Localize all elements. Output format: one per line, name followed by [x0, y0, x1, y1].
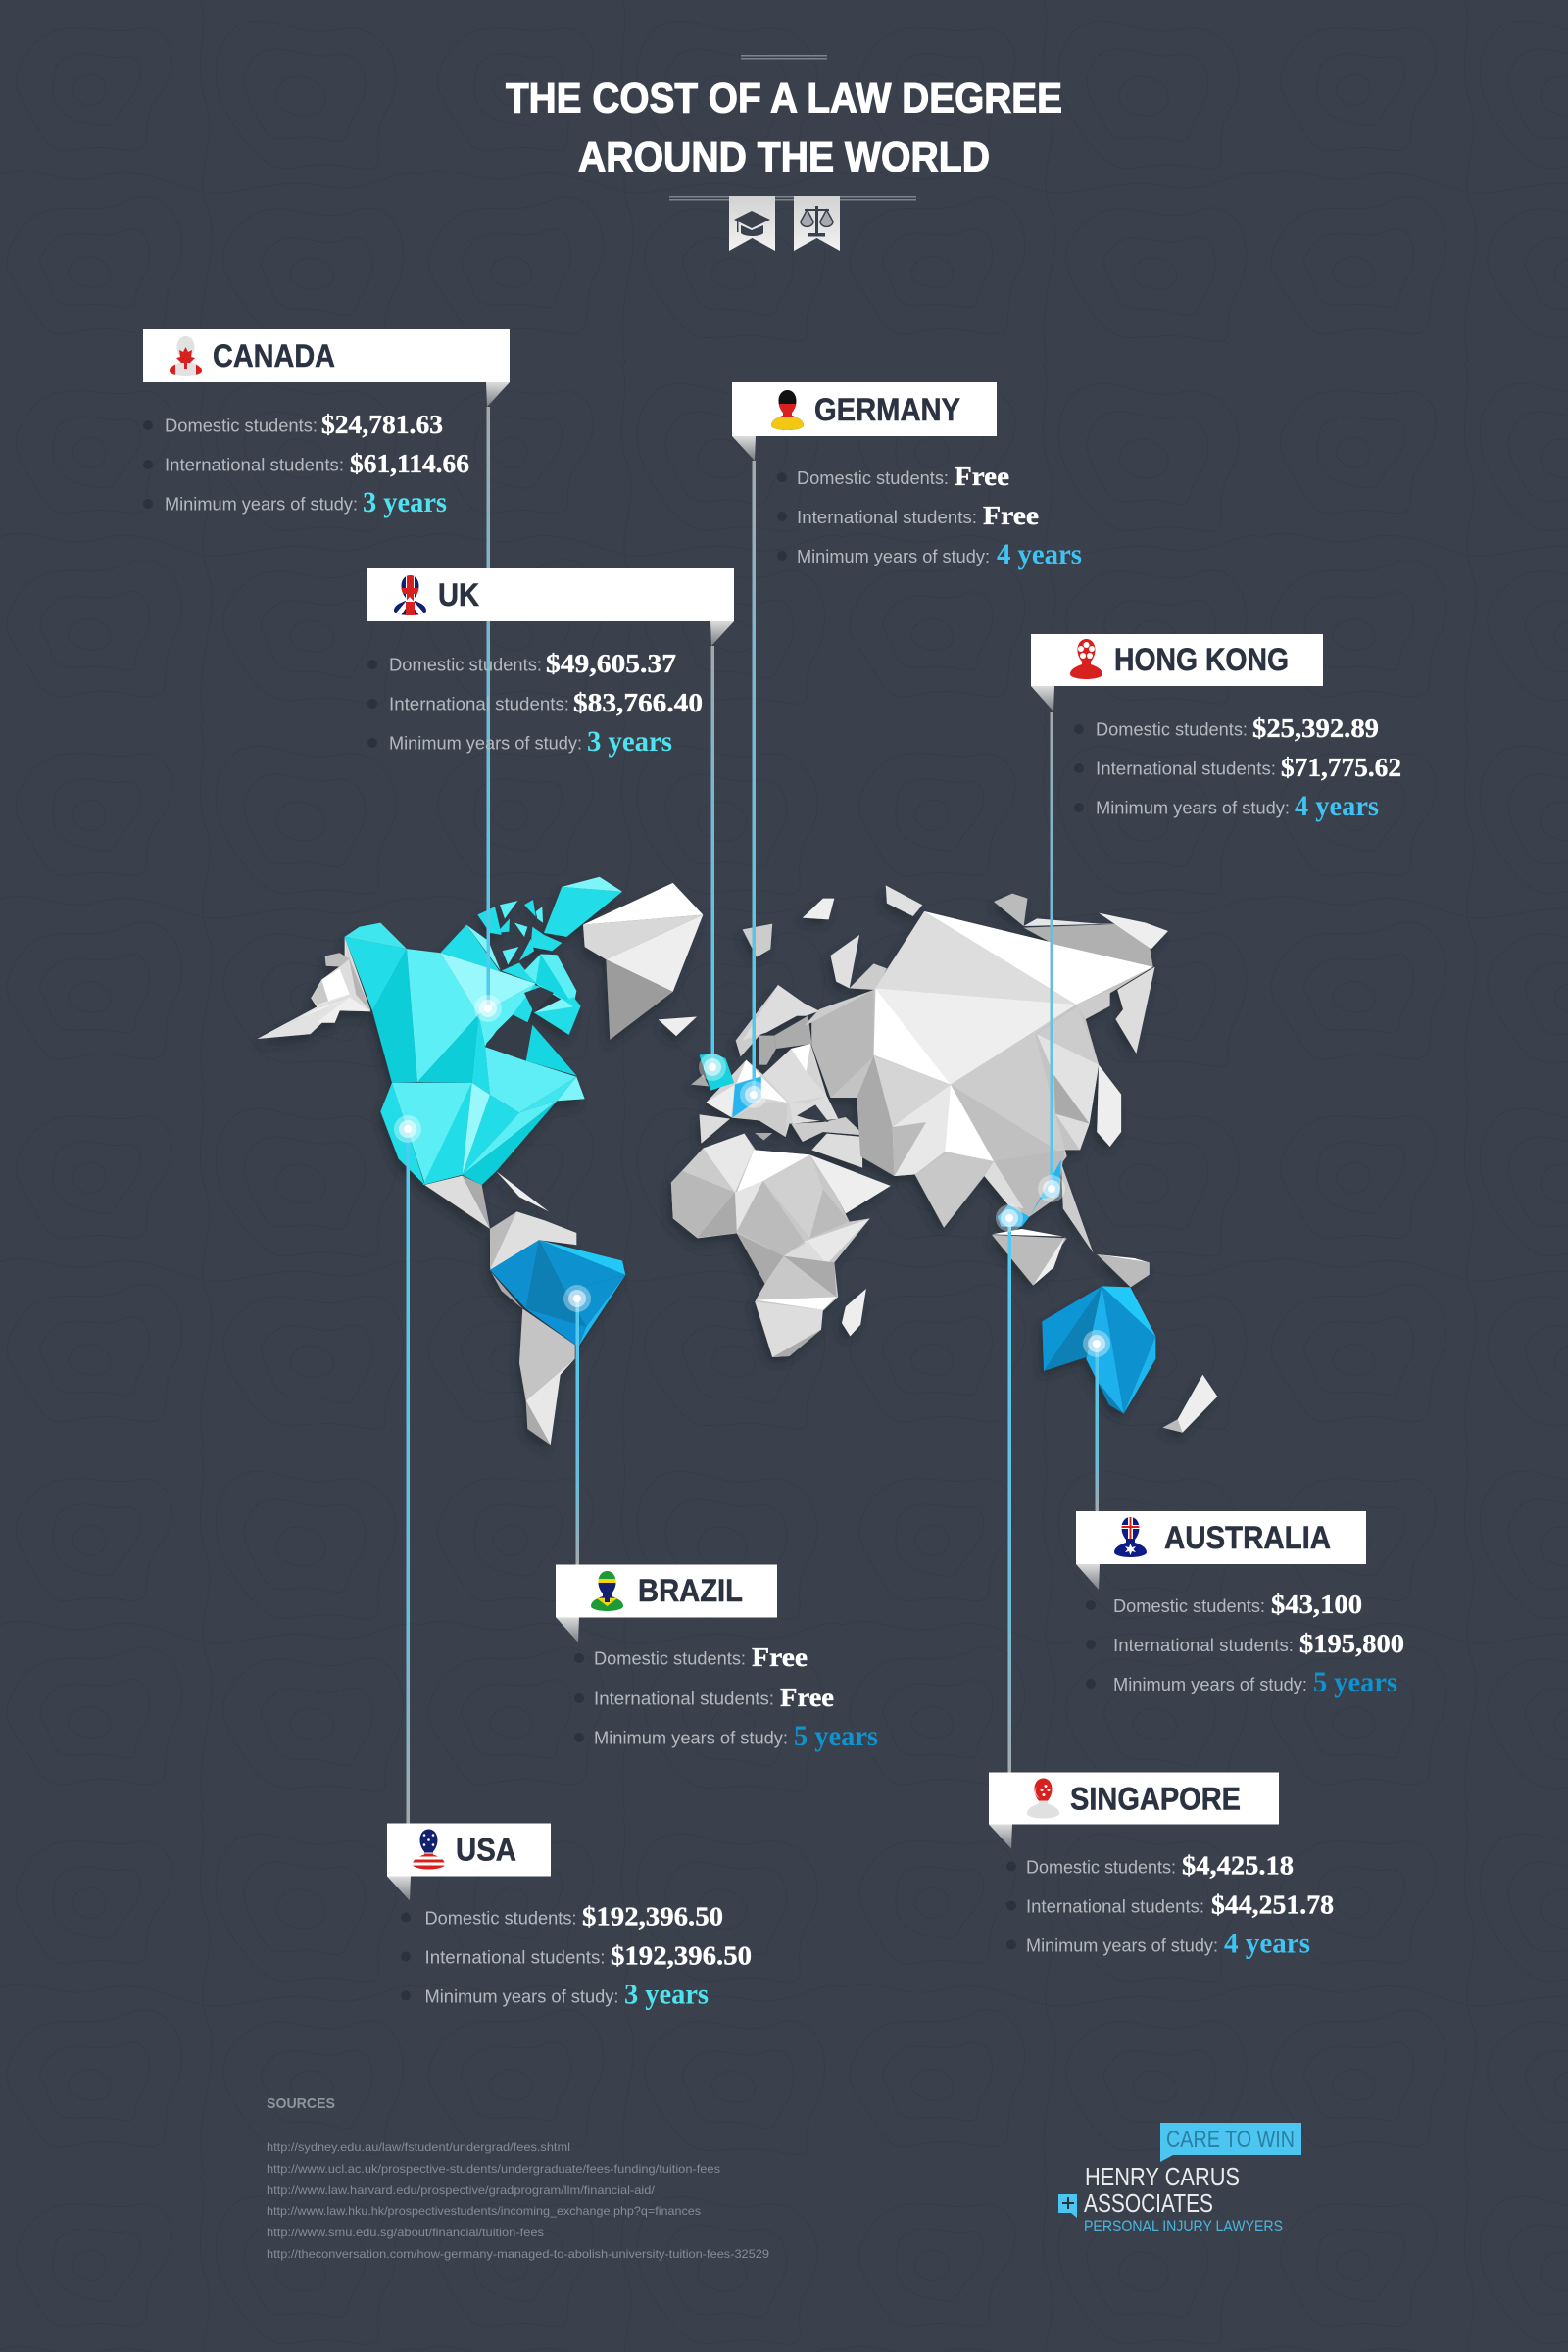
- connector: Hong Kong line: [1051, 712, 1054, 1189]
- map: Americas and Greenland: [258, 877, 703, 1445]
- panel: Germany: [732, 382, 1082, 570]
- Canada figures: Minimum years of study:: [165, 494, 358, 514]
- Australia header: [1076, 1511, 1366, 1590]
- Canada header: CANADA: [213, 338, 335, 373]
- Brazil figures: 5 years: [794, 1720, 878, 1752]
- Australia figures: 5 years: [1313, 1666, 1397, 1698]
- USA header: USA: [456, 1833, 516, 1868]
- pin: Brazil: [564, 1285, 591, 1312]
- Singapore figures: $44,251.78: [1211, 1889, 1334, 1919]
- pin: UK: [699, 1054, 726, 1081]
- pin: Singapore: [996, 1204, 1023, 1232]
- panel: Hong Kong: [1031, 634, 1401, 822]
- icon: Hong Kong flag bust: [1070, 639, 1102, 679]
- Singapore figures: [1006, 1850, 1334, 1960]
- sources: http://www.law.harvard.edu/prospective/gradprogram/llm/financial-aid/: [267, 2183, 656, 2197]
- map: Europe, Asia and Africa: [671, 885, 1168, 1357]
- UK figures: Domestic students:: [389, 655, 542, 674]
- panel: Australia: [1076, 1511, 1404, 1698]
- Australia figures: $43,100: [1271, 1590, 1362, 1619]
- pin: Hong Kong: [1038, 1175, 1065, 1202]
- Germany figures: Domestic students:: [797, 468, 949, 488]
- connector: Germany line: [753, 461, 756, 1095]
- Brazil figures: International students:: [594, 1690, 774, 1709]
- Singapore figures: 4 years: [1224, 1927, 1310, 1960]
- Australia figures: [1086, 1590, 1404, 1698]
- Hong Kong header: [1031, 634, 1323, 711]
- connector: USA line: [406, 1129, 410, 1825]
- USA figures: $192,396.50: [611, 1940, 752, 1970]
- logo: Henry Carus Associates: [1058, 2123, 1301, 2235]
- pin: Australia: [1083, 1330, 1110, 1357]
- Germany header: GERMANY: [814, 392, 960, 427]
- map: Australia and New Zealand: [1042, 1286, 1217, 1433]
- icon: Canada flag bust: [170, 336, 202, 376]
- Canada figures: [143, 410, 469, 518]
- Australia header: AUSTRALIA: [1164, 1520, 1331, 1555]
- UK figures: Minimum years of study:: [389, 733, 582, 753]
- Australia figures: Minimum years of study:: [1113, 1675, 1307, 1694]
- icon: scales of justice ribbon: [794, 196, 840, 251]
- Hong Kong figures: Minimum years of study:: [1096, 798, 1290, 817]
- Hong Kong figures: 4 years: [1295, 790, 1379, 822]
- title: THE COST OF A LAW DEGREE: [506, 74, 1062, 122]
- Singapore figures: Domestic students:: [1026, 1858, 1176, 1878]
- Brazil header: BRAZIL: [638, 1573, 743, 1608]
- sources: http://www.law.hku.hk/prospectivestudents/incoming_exchange.php?q=finances: [267, 2204, 701, 2218]
- UK figures: $49,605.37: [546, 649, 676, 678]
- pin: Canada: [474, 995, 502, 1022]
- UK figures: $83,766.40: [573, 688, 703, 717]
- Hong Kong figures: International students:: [1096, 759, 1276, 778]
- connector: Canada line: [486, 407, 490, 1008]
- Canada figures: Domestic students:: [165, 416, 318, 435]
- Canada figures: $24,781.63: [321, 410, 443, 439]
- Germany figures: International students:: [797, 508, 977, 527]
- Singapore header: SINGAPORE: [1070, 1782, 1241, 1817]
- USA figures: Domestic students:: [425, 1909, 576, 1929]
- logo: Henry Carus Associates: ASSOCIATES: [1084, 2188, 1213, 2218]
- USA figures: International students:: [425, 1948, 606, 1968]
- Hong Kong figures: Domestic students:: [1096, 719, 1248, 739]
- pin: Germany: [740, 1081, 767, 1108]
- Canada figures: 3 years: [363, 486, 447, 518]
- sources: [267, 2095, 769, 2261]
- icon: Australia flag bust: [1114, 1517, 1147, 1557]
- USA figures: $192,396.50: [582, 1901, 723, 1931]
- Singapore figures: Minimum years of study:: [1026, 1936, 1218, 1956]
- Germany figures: Free: [955, 462, 1009, 491]
- USA figures: Minimum years of study:: [425, 1987, 619, 2007]
- sources: http://www.smu.edu.sg/about/financial/tuition-fees: [267, 2226, 544, 2239]
- world map: [258, 877, 1217, 1445]
- sources: SOURCES: [267, 2095, 335, 2112]
- Singapore figures: $4,425.18: [1182, 1850, 1294, 1880]
- Hong Kong figures: $71,775.62: [1281, 753, 1401, 782]
- panel: UK: [368, 568, 734, 758]
- panel: Brazil: [556, 1564, 878, 1752]
- USA header: [387, 1823, 551, 1901]
- Germany figures: Free: [983, 501, 1039, 530]
- Germany figures: Minimum years of study:: [797, 547, 990, 566]
- Singapore header: [989, 1772, 1279, 1848]
- sources: http://www.ucl.ac.uk/prospective-students/undergraduate/fees-funding/tuition-fees: [267, 2162, 720, 2176]
- title: AROUND THE WORLD: [578, 133, 990, 180]
- icon: graduation cap ribbon: [729, 196, 775, 251]
- logo: Henry Carus Associates: HENRY CARUS: [1085, 2162, 1240, 2191]
- icon: Singapore flag bust: [1027, 1778, 1059, 1819]
- UK figures: [368, 649, 703, 758]
- USA figures: 3 years: [624, 1978, 709, 2011]
- title: [506, 55, 1062, 200]
- Brazil figures: [574, 1642, 878, 1752]
- logo: Henry Carus Associates: PERSONAL INJURY LAWYERS: [1084, 2217, 1283, 2235]
- Canada header: [143, 329, 510, 407]
- Germany figures: [777, 462, 1082, 570]
- USA figures: [401, 1901, 752, 2011]
- Australia figures: International students:: [1113, 1636, 1294, 1655]
- UK figures: International students:: [389, 694, 569, 713]
- icon: UK flag bust: [394, 575, 426, 615]
- Germany figures: 4 years: [997, 538, 1082, 570]
- sources: http://sydney.edu.au/law/fstudent/undergrad/fees.shtml: [267, 2140, 570, 2154]
- Australia figures: $195,800: [1299, 1629, 1404, 1658]
- panel: Canada: [143, 329, 510, 518]
- Brazil figures: Minimum years of study:: [594, 1729, 788, 1748]
- Brazil figures: Domestic students:: [594, 1648, 746, 1668]
- Brazil figures: Free: [752, 1642, 808, 1672]
- icon: USA flag bust: [413, 1829, 445, 1870]
- icon: Brazil flag bust: [591, 1571, 623, 1611]
- Hong Kong figures: [1074, 713, 1401, 822]
- Canada figures: $61,114.66: [350, 449, 469, 478]
- Germany header: [732, 382, 997, 461]
- panel: Singapore: [989, 1772, 1334, 1960]
- panel: USA: [387, 1823, 752, 2011]
- pin: USA: [394, 1115, 421, 1143]
- connector: Brazil line: [576, 1298, 579, 1565]
- icon: Germany flag bust: [771, 390, 804, 430]
- Brazil figures: Free: [780, 1683, 834, 1712]
- Australia figures: Domestic students:: [1113, 1596, 1265, 1616]
- Hong Kong figures: $25,392.89: [1252, 713, 1379, 743]
- UK header: UK: [438, 577, 479, 612]
- Singapore figures: International students:: [1026, 1897, 1204, 1917]
- connector: Singapore line: [1007, 1218, 1011, 1774]
- connector: Australia line: [1096, 1344, 1099, 1511]
- Canada figures: International students:: [165, 455, 344, 474]
- sources: http://theconversation.com/how-germany-managed-to-abolish-university-tuition-fees-32529: [267, 2247, 769, 2261]
- UK figures: 3 years: [587, 725, 672, 758]
- Brazil header: [556, 1564, 777, 1642]
- connector: UK line: [711, 646, 714, 1067]
- UK header: [368, 568, 734, 646]
- logo: Henry Carus Associates: CARE TO WIN: [1166, 2127, 1295, 2153]
- Hong Kong header: HONG KONG: [1114, 642, 1289, 677]
